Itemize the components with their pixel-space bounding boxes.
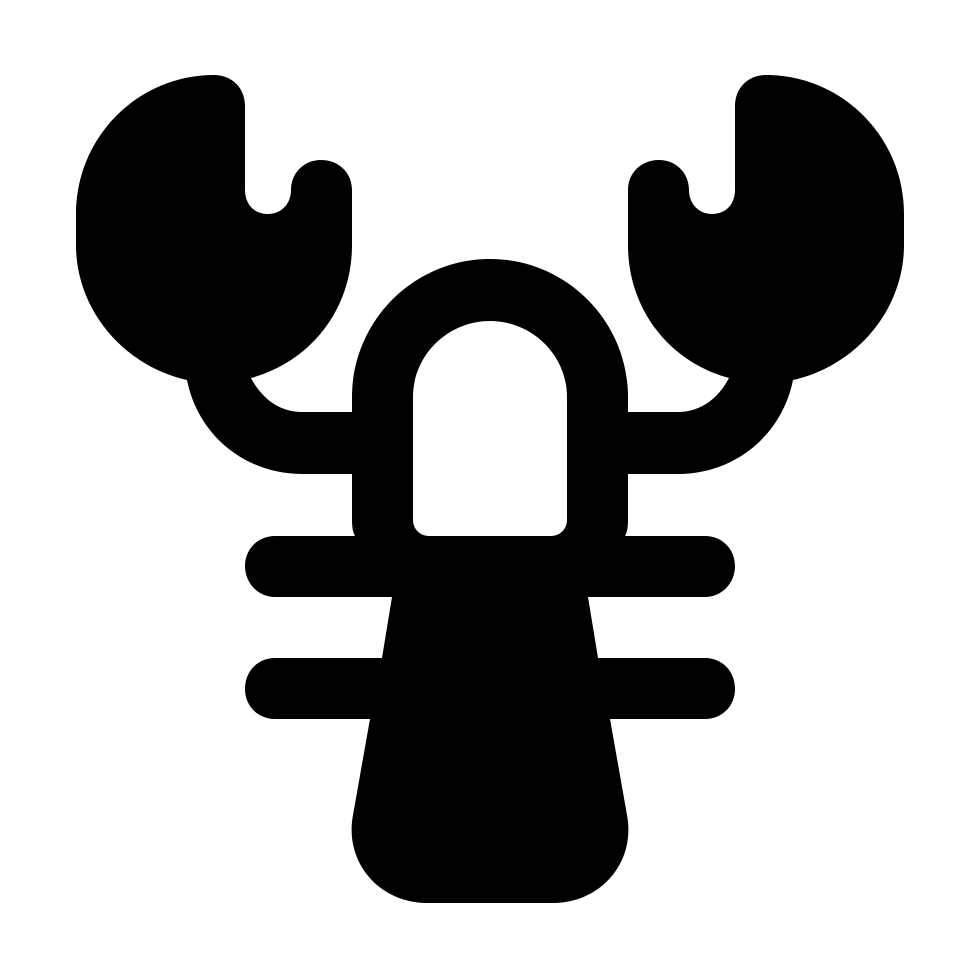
head and body	[245, 259, 735, 903]
right claw	[620, 75, 904, 474]
left claw	[76, 75, 360, 474]
